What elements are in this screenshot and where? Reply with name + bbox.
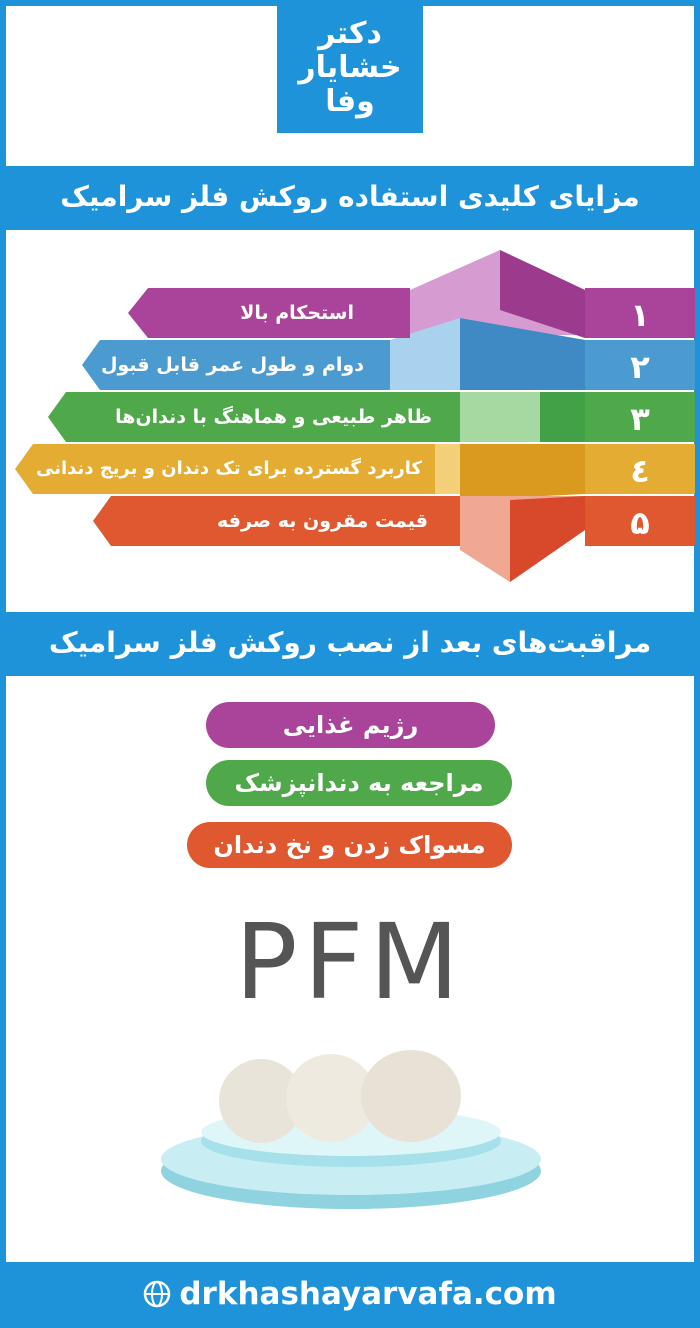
logo: خشایار	[298, 50, 402, 85]
row 1: ۱	[630, 296, 650, 334]
panel: advantages	[6, 230, 694, 612]
panel: advantages: کاربرد گسترده برای تک دندان و بریج دندانی	[36, 458, 422, 479]
image: crowns on platform	[161, 1050, 541, 1209]
row 2: ۲	[630, 348, 650, 386]
row 3: ۳	[630, 400, 650, 438]
row 3	[48, 392, 695, 442]
panel: care	[6, 676, 694, 1262]
logo	[277, 5, 423, 133]
row 1	[128, 288, 695, 338]
row 2	[82, 340, 695, 390]
row 4	[15, 444, 695, 494]
row texts: استحکام بالا	[240, 302, 354, 324]
pill: brushing	[187, 822, 512, 868]
row 5	[93, 496, 695, 546]
header 1: مزایای کلیدی استفاده روکش فلز سرامیک	[60, 180, 640, 213]
pill: diet	[206, 702, 495, 748]
pill: brushing: مسواک زدن و نخ دندان	[213, 831, 486, 859]
header 2: مراقبت‌های بعد از نصب روکش فلز سرامیک	[49, 626, 651, 659]
pill: diet: رژیم غذایی	[283, 711, 418, 739]
panel: advantages: دوام و طول عمر قابل قبول	[101, 354, 364, 376]
panel: advantages: ظاهر طبیعی و هماهنگ با دندان‌ها	[115, 406, 432, 428]
row 5: ۵	[630, 504, 650, 542]
footer: drkhashayarvafa.com	[179, 1276, 557, 1312]
pill: dentist: مراجعه به دندانپزشک	[234, 769, 484, 797]
logo: دکتر	[318, 16, 382, 51]
pill: dentist	[206, 760, 512, 806]
PFM title: PFM	[235, 901, 465, 1023]
row 4: ٤	[630, 452, 650, 490]
icon: globe	[144, 1280, 170, 1308]
3d ribbon	[390, 250, 585, 582]
logo: وفا	[325, 84, 375, 119]
panel: advantages: قیمت مقرون به صرفه	[217, 510, 428, 532]
